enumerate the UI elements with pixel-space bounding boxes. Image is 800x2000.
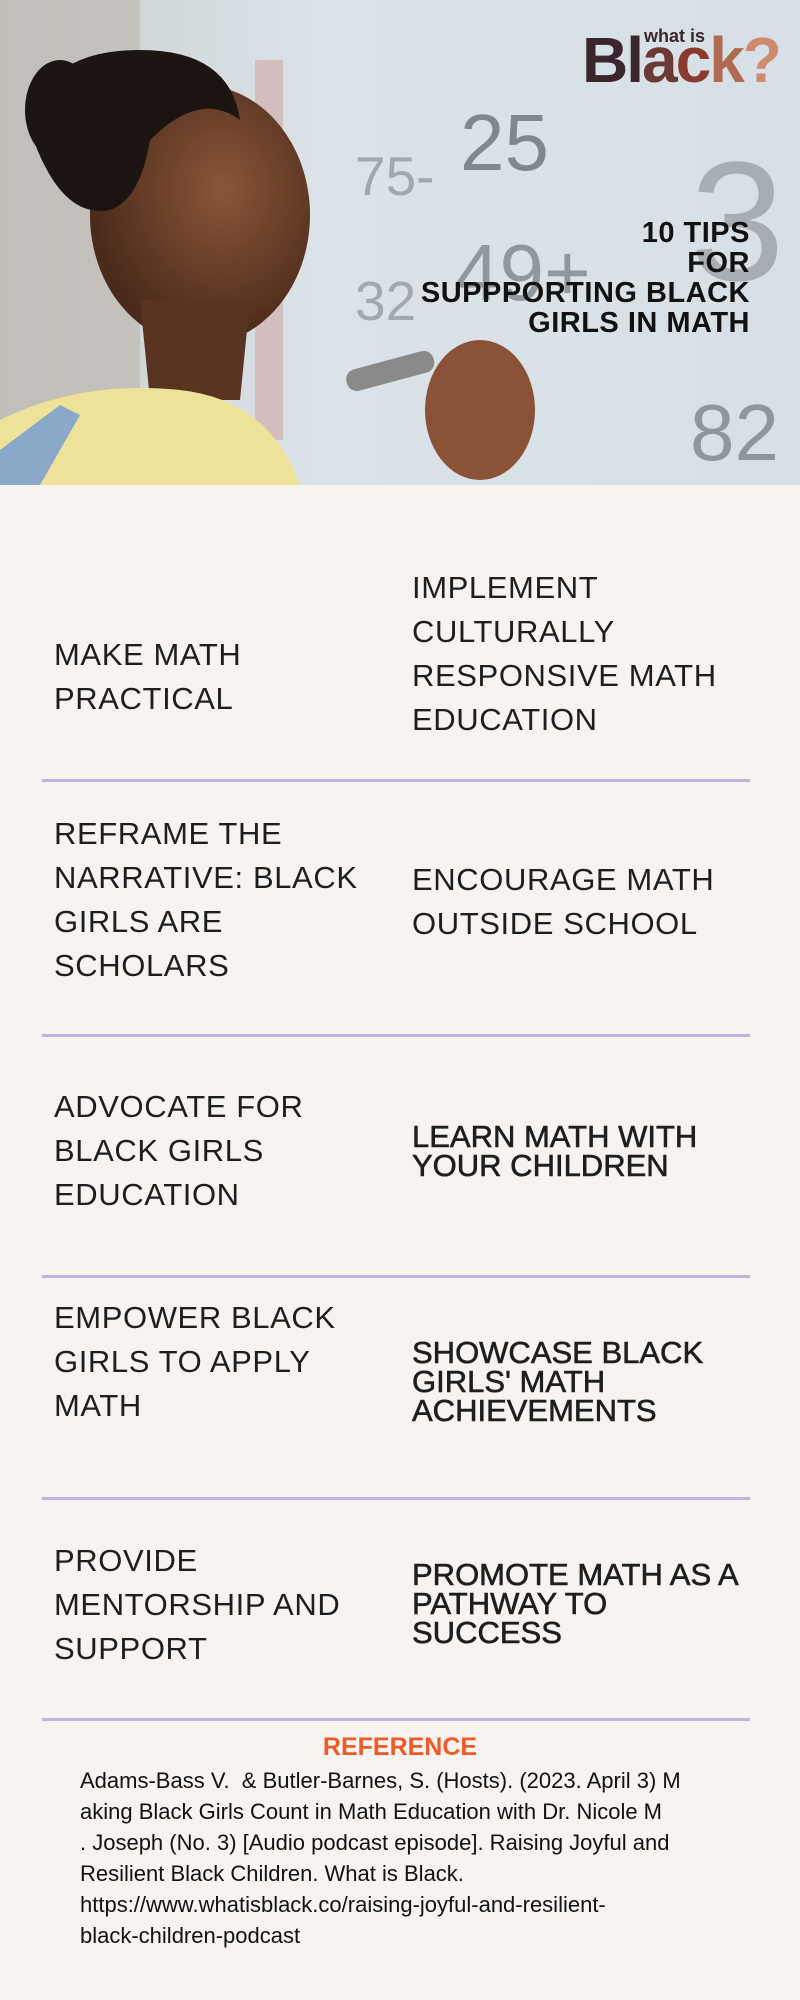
tip: make math practical: MAKE MATH [54, 637, 241, 672]
logo: what is [644, 26, 705, 46]
row 1 [54, 570, 717, 737]
tip: pathway: PROMOTE MATH AS A [412, 1557, 739, 1592]
tip: mentorship: PROVIDE MENTORSHIP AND SUPPORT [54, 1543, 340, 1666]
hand numbers [355, 98, 785, 477]
tip: make math practical [54, 637, 241, 716]
hand numbers: 32 [355, 270, 416, 332]
row 2 [54, 816, 714, 983]
reference text: Adams-Bass V. & Butler-Barnes, S. (Hosts). (2023. April 3) M [80, 1768, 681, 1793]
tip: reframe narrative: REFRAME THE NARRATIVE: BLACK GIRLS ARE SCHOLARS [54, 816, 358, 983]
tip: culturally responsive: IMPLEMENT CULTURALLY RESPONSIVE MATH EDUCATION [412, 570, 717, 737]
tip: pathway: PATHWAY TO [412, 1586, 607, 1621]
row 4 [54, 1300, 704, 1428]
reference text: . Joseph (No. 3) [Audio podcast episode]. Raising Joyful and [80, 1830, 669, 1855]
title: 10 TIPS [642, 217, 750, 249]
logo: Black? [582, 24, 780, 96]
tip: learn with children: LEARN MATH WITH YOUR CHILDREN [412, 1119, 697, 1183]
hand numbers: 3 [690, 127, 785, 317]
hand numbers: 82 [690, 388, 779, 477]
hand numbers: 49+ [455, 228, 591, 317]
tip: showcase: SHOWCASE BLACK GIRLS' MATH ACHIEVEMENTS [412, 1335, 703, 1428]
tip: make math practical: PRACTICAL [54, 681, 233, 716]
tip: advocate: ADVOCATE FOR BLACK GIRLS EDUCATION [54, 1089, 303, 1212]
hand numbers: 75- [355, 145, 434, 207]
row 5 [54, 1543, 739, 1666]
title: FOR [687, 247, 750, 279]
tip: pathway: SUCCESS [412, 1615, 562, 1650]
tip: pathway [412, 1557, 739, 1650]
tip: empower: EMPOWER BLACK GIRLS TO APPLY MATH [54, 1300, 336, 1423]
reference heading: REFERENCE [323, 1733, 477, 1761]
title: GIRLS IN MATH [528, 307, 750, 339]
title [421, 217, 750, 339]
reference text: Resilient Black Children. What is Black. [80, 1861, 464, 1886]
row 3 [54, 1089, 697, 1212]
reference text: https://www.whatisblack.co/raising-joyful-and-resilient- [80, 1892, 606, 1917]
reference text [80, 1768, 681, 1948]
tip: encourage outside school: ENCOURAGE MATH OUTSIDE SCHOOL [412, 862, 714, 941]
title: SUPPPORTING BLACK [421, 277, 750, 309]
girl [90, 85, 310, 345]
reference text: aking Black Girls Count in Math Education with Dr. Nicole M [80, 1799, 662, 1824]
header photo [0, 0, 800, 485]
hand numbers: 25 [460, 98, 549, 187]
reference text: black-children-podcast [80, 1923, 300, 1948]
